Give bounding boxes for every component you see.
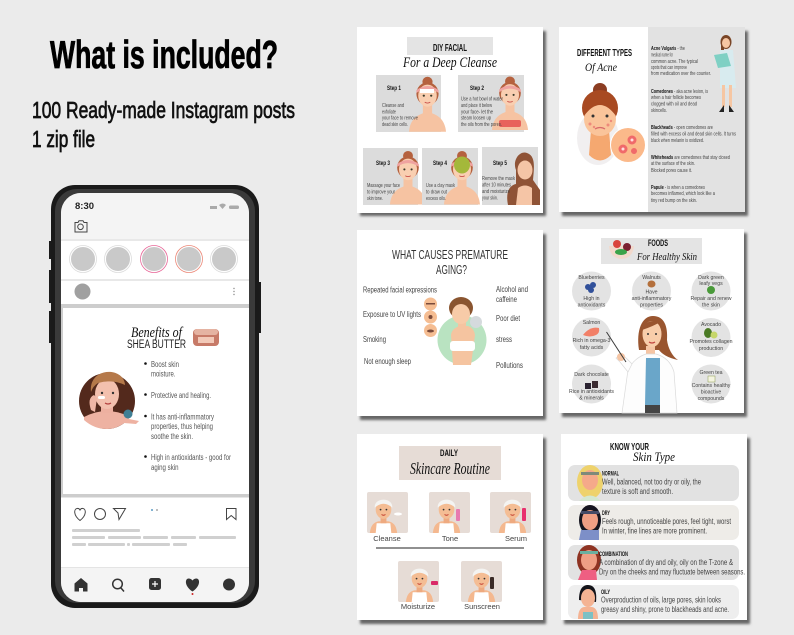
skin type: normal: texture is soft and smooth.	[602, 487, 673, 496]
food: salmon: fatty acids	[580, 345, 604, 351]
benefits bullet list: soothe the skin.	[151, 432, 193, 441]
skin type: dry	[568, 505, 739, 540]
post frame	[61, 304, 249, 498]
step 1: Step 1	[387, 86, 402, 92]
script subheading: Skincare Routine	[410, 459, 490, 478]
acne definitions	[650, 46, 736, 204]
title: What is included?	[50, 34, 278, 77]
post heading: benefits of shea butter: Benefits of	[131, 325, 183, 341]
food: avocado	[690, 318, 733, 357]
skin type: normal	[568, 465, 739, 501]
step 4: excess oils.	[426, 196, 446, 202]
acne definitions: Acne Vulgaris - the	[651, 46, 685, 52]
acne definitions: when a hair follicle becomes	[650, 95, 701, 101]
step: serum	[490, 492, 531, 543]
acne definitions: Papule - is when a comedones	[651, 185, 705, 191]
food: dark chocolate: Rice in antioxidants	[569, 389, 614, 395]
food: blueberries: Blueberries	[578, 275, 605, 281]
step 3	[363, 148, 426, 205]
stories row	[61, 239, 249, 281]
step 4	[422, 148, 480, 205]
step 5: your skin.	[482, 196, 498, 202]
food: green tea: Green tea	[699, 370, 723, 376]
step 3: Step 3	[376, 161, 391, 167]
acne definitions: clogged with oil and dead	[651, 102, 697, 108]
heading	[392, 248, 508, 277]
food: walnuts: Walnuts	[642, 275, 661, 281]
skin type: dry: DRY	[602, 511, 610, 517]
post heading: benefits of shea butter	[127, 325, 186, 351]
post heading: benefits of shea butter: SHEA BUTTER	[127, 339, 186, 351]
causes: right column: caffeine	[496, 295, 517, 304]
food: green tea: bioactive	[701, 390, 721, 396]
food: dark green leafy vegs	[691, 272, 732, 310]
skin type: dry: In winter, fine lines are more prominent.	[602, 526, 707, 536]
skin type: combination: Dry on the cheeks and may fluctuate between seasons.	[599, 568, 745, 576]
food: walnuts: Have	[645, 290, 658, 296]
subtitle: contents: 100 Ready-made Instagram posts	[32, 97, 295, 123]
step 2: the oils from the pores.	[461, 122, 502, 128]
card: foods for healthy skin	[559, 229, 747, 417]
food: dark green leafy vegs: Repair and renew	[691, 296, 732, 302]
benefits bullet list	[144, 360, 231, 472]
step 2: steam loosen up	[461, 116, 491, 122]
illustration: doctor	[714, 35, 736, 112]
heading: AGING?	[436, 263, 467, 277]
causes: right column	[496, 285, 528, 370]
acne definitions: Comedones - aka acne lesion, is	[651, 89, 708, 95]
causes: right column: Poor diet	[496, 314, 521, 323]
acne definitions: becomes inflamed, which look like a	[651, 191, 715, 197]
food: green tea	[692, 364, 731, 404]
step 4: Step 4	[433, 161, 448, 167]
skin type: oily: Overproduction of oils, large pores, skin looks	[601, 596, 721, 604]
acne definitions: Blackheads - open comedones are	[651, 125, 713, 131]
script subheading: For Healthy Skin	[636, 251, 697, 263]
script subheading: Of Acne	[585, 60, 618, 74]
benefits bullet list: properties, thus helping	[151, 422, 213, 431]
food: green tea: Contains healthy	[692, 383, 731, 389]
step 2	[458, 75, 528, 132]
benefits bullet list: Boost skin	[151, 360, 179, 369]
post action icons	[75, 508, 236, 520]
step 5: Step 5	[493, 161, 508, 167]
heading: FOODS	[648, 238, 668, 248]
benefits bullet list: aging skin	[151, 463, 178, 472]
card: daily skincare routine	[357, 434, 546, 624]
icon: salad bowl	[609, 240, 634, 259]
skin type: oily: greasy and shiny, prone to blackheads and acne.	[601, 605, 729, 614]
benefits bullet list: Protective and healing.	[151, 391, 211, 400]
food: dark green leafy vegs: the skin	[702, 302, 720, 308]
step 1: Cleanse and	[382, 103, 404, 109]
illustration: woman applying cream	[79, 372, 139, 429]
causes: left column: Repeated facial expressions	[363, 286, 437, 294]
acne definitions: from medication over the counter.	[651, 71, 711, 77]
step: tone	[429, 492, 470, 543]
heading: DAILY	[440, 448, 458, 459]
food: blueberries: antioxidants	[578, 302, 606, 308]
skin type: oily: OILY	[601, 590, 610, 596]
step 1: your face to remove	[382, 116, 418, 122]
skin type: normal: Well, balanced, not too dry or oily, the	[602, 478, 701, 486]
heading: KNOW YOUR	[610, 442, 649, 453]
heading band	[399, 446, 501, 480]
food: blueberries: High in	[583, 296, 600, 302]
illustration: woman with detail circles	[424, 297, 486, 365]
phone mockup	[49, 185, 261, 608]
carousel dots	[151, 509, 158, 511]
step 4: Use a clay mask	[426, 183, 455, 189]
card: DIY facial	[357, 27, 546, 216]
step 5: after 10 minutes	[482, 182, 511, 188]
illustration: doctor with pointer	[606, 316, 678, 413]
food: walnuts: anti-inflammatory	[632, 296, 672, 302]
bottom navigation bar	[61, 567, 249, 602]
acne definitions: Blocked pores cause it.	[651, 168, 692, 174]
script subheading: Skin Type	[633, 449, 675, 464]
step 5: and moisturize	[482, 189, 510, 195]
skin type: combination: A combination of dry and oily, oily on the T-zone &	[599, 558, 733, 567]
heading: DIY FACIAL	[433, 43, 467, 54]
step: cleanse: Cleanse	[373, 534, 401, 543]
acne definitions: spots that can improve	[651, 65, 687, 71]
step 3: skin tone.	[367, 196, 383, 202]
food: dark chocolate: & minerals	[579, 396, 604, 402]
food: avocado: Avocado	[701, 322, 721, 328]
causes: left column: Not enough sleep	[364, 357, 411, 366]
causes: right column: stress	[496, 335, 512, 344]
status and header bar	[61, 193, 249, 239]
skin type: dry: Feels rough, unnoticeable pores, feel tight, worst	[602, 517, 732, 526]
step: tone: Tone	[442, 534, 458, 543]
causes: left column: Exposure to UV lights	[363, 310, 421, 319]
acne definitions: medical name for	[651, 52, 673, 58]
step: sunscreen: Sunscreen	[464, 602, 500, 611]
step 5: Remove the mask	[482, 176, 515, 182]
step 3: Massage your face	[367, 183, 400, 189]
card: premature aging	[357, 230, 546, 420]
food: salmon	[572, 318, 611, 356]
heading: DIFFERENT TYPES	[577, 48, 632, 59]
card: different types of acne	[559, 27, 748, 216]
food: walnuts	[632, 272, 672, 310]
icon: shea butter jar	[193, 329, 219, 346]
food: salmon: Salmon	[583, 320, 600, 326]
step: sunscreen	[461, 561, 502, 611]
skin type: oily	[568, 585, 739, 619]
acne definitions: Whiteheads are comedones that stay closed	[651, 155, 730, 161]
acne definitions: skincells.	[651, 108, 667, 114]
food: dark chocolate	[569, 364, 614, 404]
definitions panel	[648, 27, 745, 212]
acne definitions: filled with excess oil and dead skin cells. It turns	[651, 132, 736, 138]
skin type: combination	[568, 545, 745, 580]
card: know your skin type	[561, 434, 750, 624]
food: green tea: compounds	[698, 396, 725, 402]
script heading: For a Deep Cleanse	[402, 55, 497, 71]
post header	[74, 284, 235, 300]
icon: camera	[75, 221, 87, 232]
step 1	[376, 75, 446, 132]
step 1: dead skin cells.	[382, 122, 408, 128]
step: serum: Serum	[505, 534, 527, 543]
step 2: your face- let the	[461, 110, 493, 116]
step 1: exfoliate	[382, 110, 396, 116]
heading band	[601, 238, 702, 264]
food: avocado: Promotes collagen	[690, 339, 733, 345]
step 2: Step 2	[470, 86, 485, 92]
skin type: combination: COMBINATION	[599, 552, 628, 558]
causes: left column: Smoking	[363, 335, 386, 344]
food: dark chocolate: Dark chocolate	[574, 372, 609, 378]
acne definitions: common acne. The typical	[651, 59, 698, 65]
benefits bullet list: moisture.	[151, 370, 176, 378]
step 2: and place it below	[461, 103, 492, 109]
step: moisturize	[398, 561, 439, 611]
phone body	[51, 185, 259, 608]
phone side buttons	[49, 241, 261, 343]
acne definitions: at the surface of the skin.	[651, 161, 695, 167]
step: cleanse	[367, 492, 408, 543]
caption placeholder lines	[72, 529, 236, 546]
acne definitions: black when melanin is oxidized.	[651, 138, 704, 144]
step 3: to improve your	[367, 190, 395, 196]
subtitle: contents	[32, 97, 295, 152]
food: salmon: Rich in omega-3	[573, 338, 610, 344]
step 4: to draw out	[426, 190, 448, 196]
causes: left column	[363, 286, 437, 366]
phone screen	[61, 193, 249, 602]
food: walnuts: properties	[640, 302, 663, 308]
step: moisturize: Moisturize	[401, 602, 435, 611]
causes: right column: Alcohol and	[496, 285, 528, 294]
step 2: Use a hot bowl of water	[461, 96, 503, 102]
illustration: face with acne	[577, 83, 646, 165]
clock: 8:30	[75, 201, 94, 211]
food: blueberries	[572, 272, 611, 310]
subtitle: contents: 1 zip file	[32, 126, 95, 152]
heading: WHAT CAUSES PREMATURE	[392, 248, 508, 262]
causes: right column: Pollutions	[496, 361, 523, 370]
food: dark green leafy vegs: leafy vegs	[699, 281, 723, 287]
status icons	[210, 204, 239, 209]
food: dark green leafy vegs: Dark green	[698, 275, 724, 281]
step 5	[482, 147, 540, 205]
heading band	[407, 37, 493, 55]
food: avocado: production	[699, 346, 723, 352]
acne definitions: tiny red bump on the skin.	[651, 198, 697, 204]
skin type: normal: NORMAL	[602, 472, 619, 478]
benefits bullet list: High in antioxidants - good for	[151, 453, 231, 462]
benefits bullet list: It has anti-inflammatory	[151, 412, 214, 422]
